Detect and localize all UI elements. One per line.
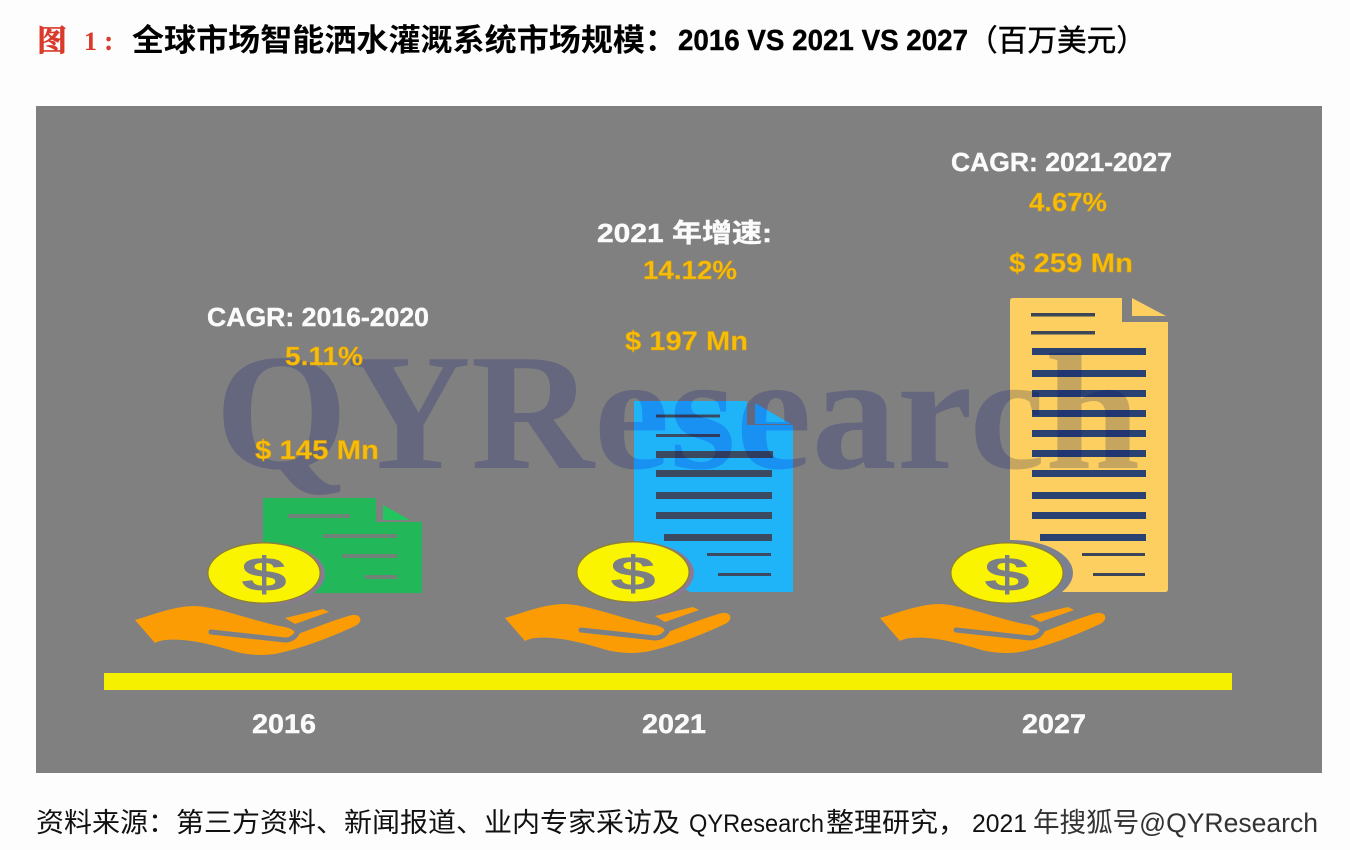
title: :: [104, 26, 113, 57]
title: 全球市场智能洒水灌溉系统市场规模: [132, 23, 645, 58]
panel: market size chart: [36, 106, 1322, 773]
year label 2021: 2021: [642, 709, 706, 739]
title: ：: [645, 23, 676, 58]
source note: 年搜狐号@QYResearch: [1033, 808, 1318, 838]
icon: green document 2016: [263, 498, 422, 593]
icon: coin and hand 2016: $: [241, 549, 288, 602]
source note: 整理研究，: [826, 808, 966, 838]
watermark: QYResearch: [215, 320, 1140, 504]
icon: yellow document 2027: [1010, 298, 1168, 592]
callout 2021: 14.12%: [643, 255, 737, 285]
callout 2016: $ 145 Mn: [255, 435, 379, 465]
callout 2021: [597, 218, 772, 356]
callout 2021: 2021 年增速:: [597, 218, 772, 248]
callout 2027: CAGR: 2021-2027: [951, 147, 1172, 177]
icon: coin and hand 2027: $: [984, 549, 1031, 602]
timeline bar: [104, 673, 1232, 690]
source note: [36, 808, 1318, 838]
callout 2027: $ 259 Mn: [1009, 248, 1133, 278]
callout 2016: 5.11%: [285, 341, 363, 371]
callout 2027: [951, 147, 1172, 278]
icon: coin and hand 2027: [880, 540, 1105, 653]
icon: coin and hand 2016: [135, 542, 360, 655]
callout 2021: $ 197 Mn: [625, 326, 748, 356]
title: （百万美元）: [968, 25, 1146, 58]
icon: blue document 2021: [634, 401, 793, 592]
icon: coin and hand 2021: $: [610, 548, 657, 601]
callout 2016: CAGR: 2016-2020: [207, 302, 429, 332]
title: 1: [84, 27, 97, 56]
title: 2016 VS 2021 VS 2027: [678, 25, 968, 57]
source note: 资料来源：第三方资料、新闻报道、业内专家采访及: [36, 808, 680, 838]
year label 2016: 2016: [252, 709, 316, 739]
icon: coin and hand 2021: [505, 541, 730, 653]
title: [37, 16, 1146, 60]
callout 2027: 4.67%: [1029, 187, 1107, 217]
source note: QYResearch: [689, 810, 824, 838]
callout 2016: [207, 302, 429, 465]
source note: 2021: [972, 810, 1027, 838]
year label 2027: 2027: [1022, 709, 1086, 739]
title: 图: [37, 16, 67, 60]
